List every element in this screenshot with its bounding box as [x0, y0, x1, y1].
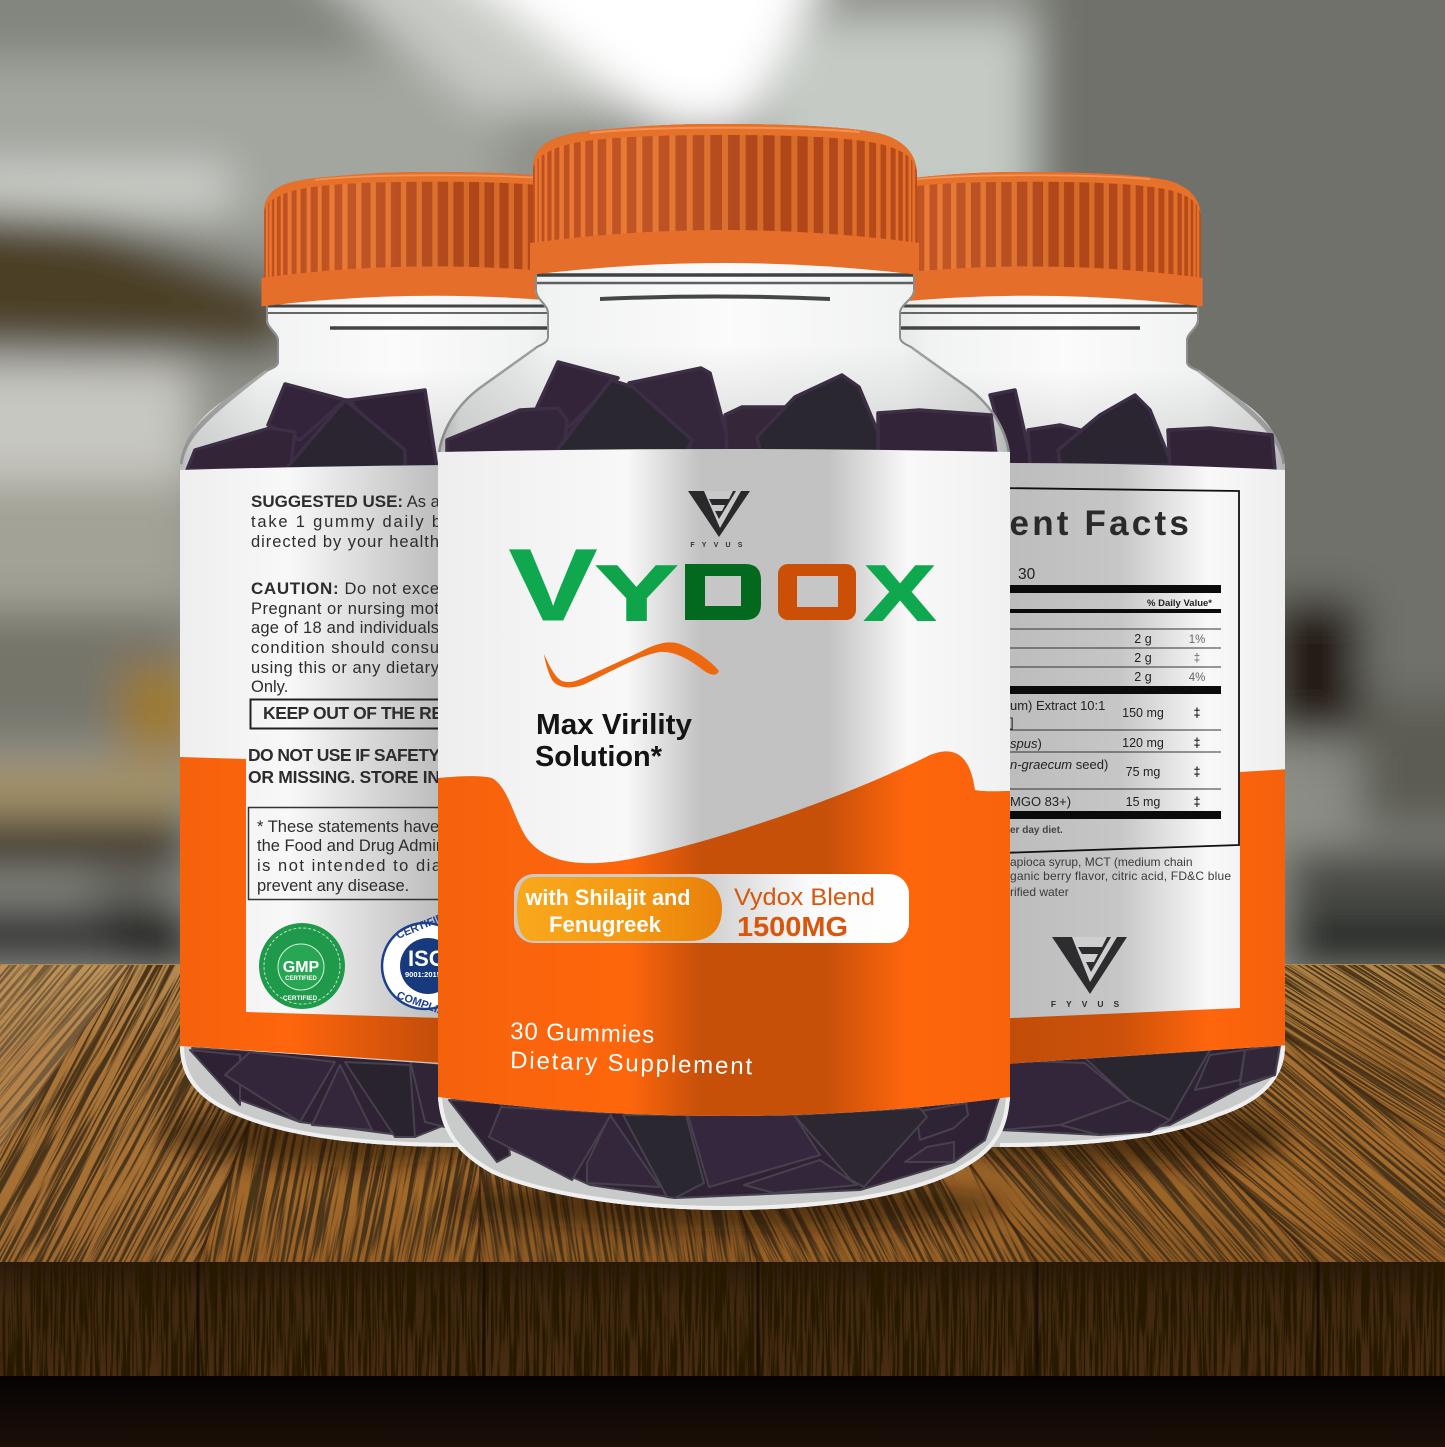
- product count text: [510, 1018, 753, 1080]
- nutrient rows: 2 g: [1134, 670, 1152, 684]
- ingredient names: um) Extract 10:1: [1010, 698, 1105, 713]
- tagline: Solution*: [535, 741, 663, 773]
- orange swoosh: [544, 642, 719, 687]
- FYVUS logo, centre: [688, 491, 750, 549]
- blend pill: with Shilajit and: [525, 885, 690, 910]
- light on planks at the back corners: [0, 965, 129, 1150]
- Vydox wordmark: O: [779, 551, 855, 636]
- nutrient rows: [1122, 632, 1205, 809]
- right bottle label: [990, 463, 1290, 1065]
- panel heading: ent Facts: [1010, 504, 1192, 543]
- front seams: [198, 1262, 1318, 1376]
- FYVUS logo, right: [1051, 937, 1129, 1009]
- FYVUS logo, right: FYVUS: [1051, 999, 1129, 1009]
- blend pill: 1500MG: [737, 911, 848, 942]
- plank tone variation: [0, 965, 1318, 1262]
- left bottom gummies: [190, 1048, 445, 1137]
- left bottle usage text: KEEP OUT OF THE RE: [263, 703, 443, 723]
- bottom gummies: [449, 1095, 1000, 1198]
- table front face: [0, 1262, 1445, 1376]
- left bottle usage text: condition should consu: [251, 639, 439, 657]
- left bottle usage text: Pregnant or nursing mot: [251, 600, 439, 618]
- centre bottle cap: [525, 120, 925, 275]
- ISO certified seal: CERTIFIED: [395, 909, 453, 942]
- ISO certified seal: COMPLIANT: [395, 990, 461, 1023]
- caution: CAUTION: Do not exce: [251, 579, 439, 598]
- Vydox wordmark: Y: [596, 549, 677, 637]
- daily value heading: % Daily Value*: [1147, 598, 1212, 609]
- product count text: 30 Gummies: [510, 1018, 655, 1049]
- Vydox wordmark: D: [686, 551, 760, 636]
- ISO certified seal: [382, 909, 468, 1023]
- other ingredients text: [1010, 855, 1231, 899]
- table top surface: [0, 964, 1445, 1263]
- GMP certified seal: [259, 923, 345, 1009]
- nutrient rows: ‡: [1194, 653, 1200, 665]
- supplement facts panel: 30: [1018, 566, 1036, 583]
- other ingredients text: ganic berry flavor, citric acid, FD&C blue: [1010, 869, 1231, 883]
- nutrient rows: 2 g: [1134, 651, 1152, 665]
- nutrient rows: 120 mg: [1122, 736, 1164, 750]
- do not use: DO NOT USE IF SAFETY: [248, 745, 440, 765]
- product count text: Dietary Supplement: [510, 1047, 753, 1080]
- left bottle usage text: directed by your health: [251, 533, 439, 551]
- nutrient rows: ‡: [1194, 706, 1201, 720]
- nutrient rows: 1%: [1189, 634, 1205, 646]
- left bottle usage text: [248, 492, 450, 900]
- left bottle usage text: OR MISSING. STORE IN: [248, 767, 440, 787]
- left bottle glass: [180, 296, 547, 1147]
- blurred room background: [0, 0, 1445, 1040]
- blend pill: Fenugreek: [549, 912, 662, 937]
- letter D block: [685, 564, 761, 620]
- ingredient names: MGO 83+): [1010, 794, 1071, 809]
- tagline: [535, 709, 692, 773]
- left bottle cap: [257, 168, 613, 306]
- orange wave panel: [438, 751, 1010, 1116]
- letter O block: [778, 564, 856, 620]
- top gummies: [447, 362, 996, 455]
- ingredient names: ]: [1010, 715, 1014, 730]
- centre bottle label: [438, 449, 1010, 1116]
- left top gummies: [187, 384, 437, 470]
- nutrient rows: ‡: [1194, 765, 1201, 779]
- other ingredients text: apioca syrup, MCT (medium chain: [1010, 855, 1193, 869]
- left bottle usage text: * These statements have: [257, 818, 439, 836]
- left bottle usage text: Only.: [251, 678, 288, 696]
- ingredient names: [1010, 698, 1108, 809]
- left bottle usage text: take 1 gummy daily b: [251, 513, 441, 531]
- left bottle usage text: using this or any dietary: [251, 659, 440, 677]
- left bottle: back label: [180, 296, 547, 1147]
- left bottle usage text: age of 18 and individuals: [251, 619, 439, 637]
- facts rules: [1000, 585, 1221, 819]
- wooden table: [0, 964, 1445, 1447]
- neck ridge highlights: [535, 273, 915, 277]
- ISO certified seal: ISO: [408, 946, 446, 971]
- disclaimer box: [248, 808, 448, 900]
- blend pill: [514, 874, 909, 943]
- GMP certified seal: CERTIFIED: [283, 995, 317, 1002]
- shilajit pill section: [517, 877, 722, 941]
- centre bottle glass: [430, 260, 1020, 1220]
- keep out box: [250, 700, 450, 728]
- nutrient rows: ‡: [1194, 795, 1201, 809]
- Vydox wordmark: V: [509, 528, 597, 642]
- nutrient rows: 2 g: [1134, 632, 1152, 646]
- GMP certified seal: GMP: [283, 959, 320, 976]
- supplement facts panel: er day diet.: [1010, 825, 1063, 836]
- tagline: Max Virility: [536, 709, 692, 741]
- plank seams: [0, 965, 1445, 1262]
- ingredient names: spus): [1010, 736, 1042, 751]
- nutrient rows: 150 mg: [1122, 706, 1164, 720]
- right bottom gummies: [1000, 1042, 1280, 1135]
- nutrient rows: 75 mg: [1126, 765, 1160, 779]
- table base shadow: [0, 1376, 1445, 1447]
- suggested use: SUGGESTED USE: As a: [251, 492, 441, 511]
- GMP certified seal: CERTIFIED: [285, 976, 317, 982]
- blend amount: Vydox Blend: [734, 884, 875, 911]
- nutrient rows: 15 mg: [1126, 795, 1160, 809]
- left bottle usage text: prevent any disease.: [257, 877, 409, 895]
- nutrient rows: ‡: [1194, 736, 1201, 750]
- right bottle: supplement facts: [901, 296, 1285, 1147]
- left bottle usage text: the Food and Drug Admin: [257, 837, 445, 855]
- FYVUS logo, centre: FYVUS: [690, 542, 750, 549]
- Vydox wordmark: [509, 528, 935, 642]
- centre bottle: [430, 260, 1020, 1220]
- supplement facts panel: [1000, 488, 1239, 853]
- nutrient rows: 4%: [1189, 672, 1205, 684]
- ISO certified seal: 9001:2015: [405, 970, 441, 979]
- left bottle label: [180, 465, 450, 1065]
- ingredient names: n-graecum seed): [1010, 757, 1108, 772]
- left bottle usage text: is not intended to dia: [257, 857, 442, 875]
- Vydox wordmark: X: [865, 549, 935, 637]
- right bottle cap: [852, 168, 1208, 306]
- wood grain by plank: [0, 965, 1445, 1262]
- bottle shadows on table: [160, 1103, 1290, 1231]
- right bottle glass: [901, 296, 1285, 1147]
- right top gummies: [990, 390, 1275, 470]
- other ingredients text: rified water: [1010, 885, 1069, 899]
